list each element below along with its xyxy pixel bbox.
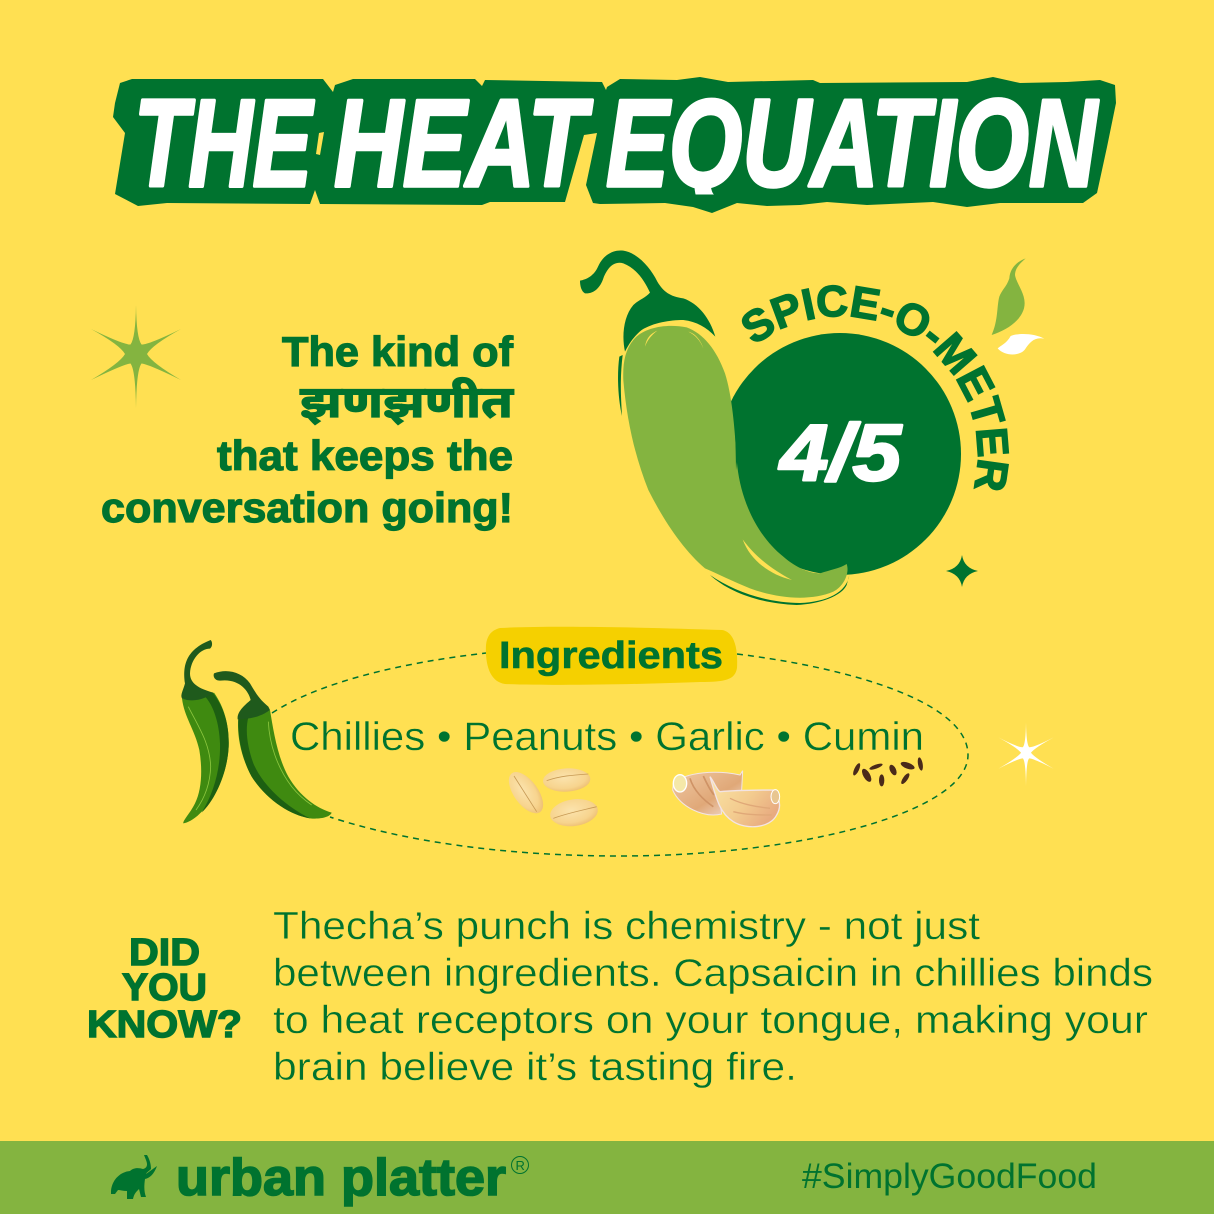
dial curved label: SPICE-O-METER [742,284,1010,490]
icon: green flame [992,258,1026,335]
peanut 2 [542,767,591,793]
garlic clove back [673,771,743,815]
ingredients heading badge [486,627,737,685]
garlic clove front [710,777,780,827]
tagline text: conversation going! [101,484,513,531]
registered mark: R [516,1158,525,1173]
chilli left [181,640,229,823]
fact paragraph: to heat receptors on your tongue, making your [273,999,1148,1042]
ingredients heading badge: Ingredients [499,635,723,677]
fact paragraph: between ingredients. Capsaicin in chillies binds [273,952,1153,995]
did you know label: DID [129,932,200,974]
icon: elephant logo [111,1155,157,1199]
tagline text: that keeps the [217,432,513,479]
tagline text: The kind of [282,328,514,375]
icon: peanuts [502,766,600,829]
icon: white flame [998,334,1044,354]
title: The Heat Equation: HEAT [334,75,593,213]
sparkle: green star [91,305,181,408]
fact paragraph [273,905,1153,1089]
sparkle: dark star [946,555,978,587]
hashtag: #SimplyGoodFood [802,1157,1097,1196]
did you know label: KNOW? [87,1004,242,1046]
tagline text: झणझणीत [300,377,514,427]
sparkle: white star [998,722,1054,786]
did you know label: YOU [122,967,207,1009]
ingredient list: Chillies • Peanuts • Garlic • Cumin [290,715,924,759]
registered mark [512,1156,528,1174]
ingredients ring [272,653,968,856]
did you know label [87,932,242,1046]
title: The Heat Equation: THE [134,75,314,213]
icon: large green chilli [580,250,849,605]
title: The Heat Equation [113,75,1116,213]
spice-o-meter dial [731,284,1010,575]
icon: garlic [673,771,780,827]
chilli right [214,671,332,819]
icon: green chillies [181,640,332,823]
dial rating: 4/5 [778,408,903,497]
peanut 3 [548,796,600,829]
tagline text [101,328,514,531]
brand name: urban platter [176,1149,506,1207]
fact paragraph: brain believe it’s tasting fire. [273,1046,797,1089]
peanut 1 [502,766,550,819]
dial circle [719,333,961,575]
fact paragraph: Thecha’s punch is chemistry - not just [273,905,980,948]
icon: cumin seeds [852,757,924,786]
footer band [0,1141,1214,1214]
